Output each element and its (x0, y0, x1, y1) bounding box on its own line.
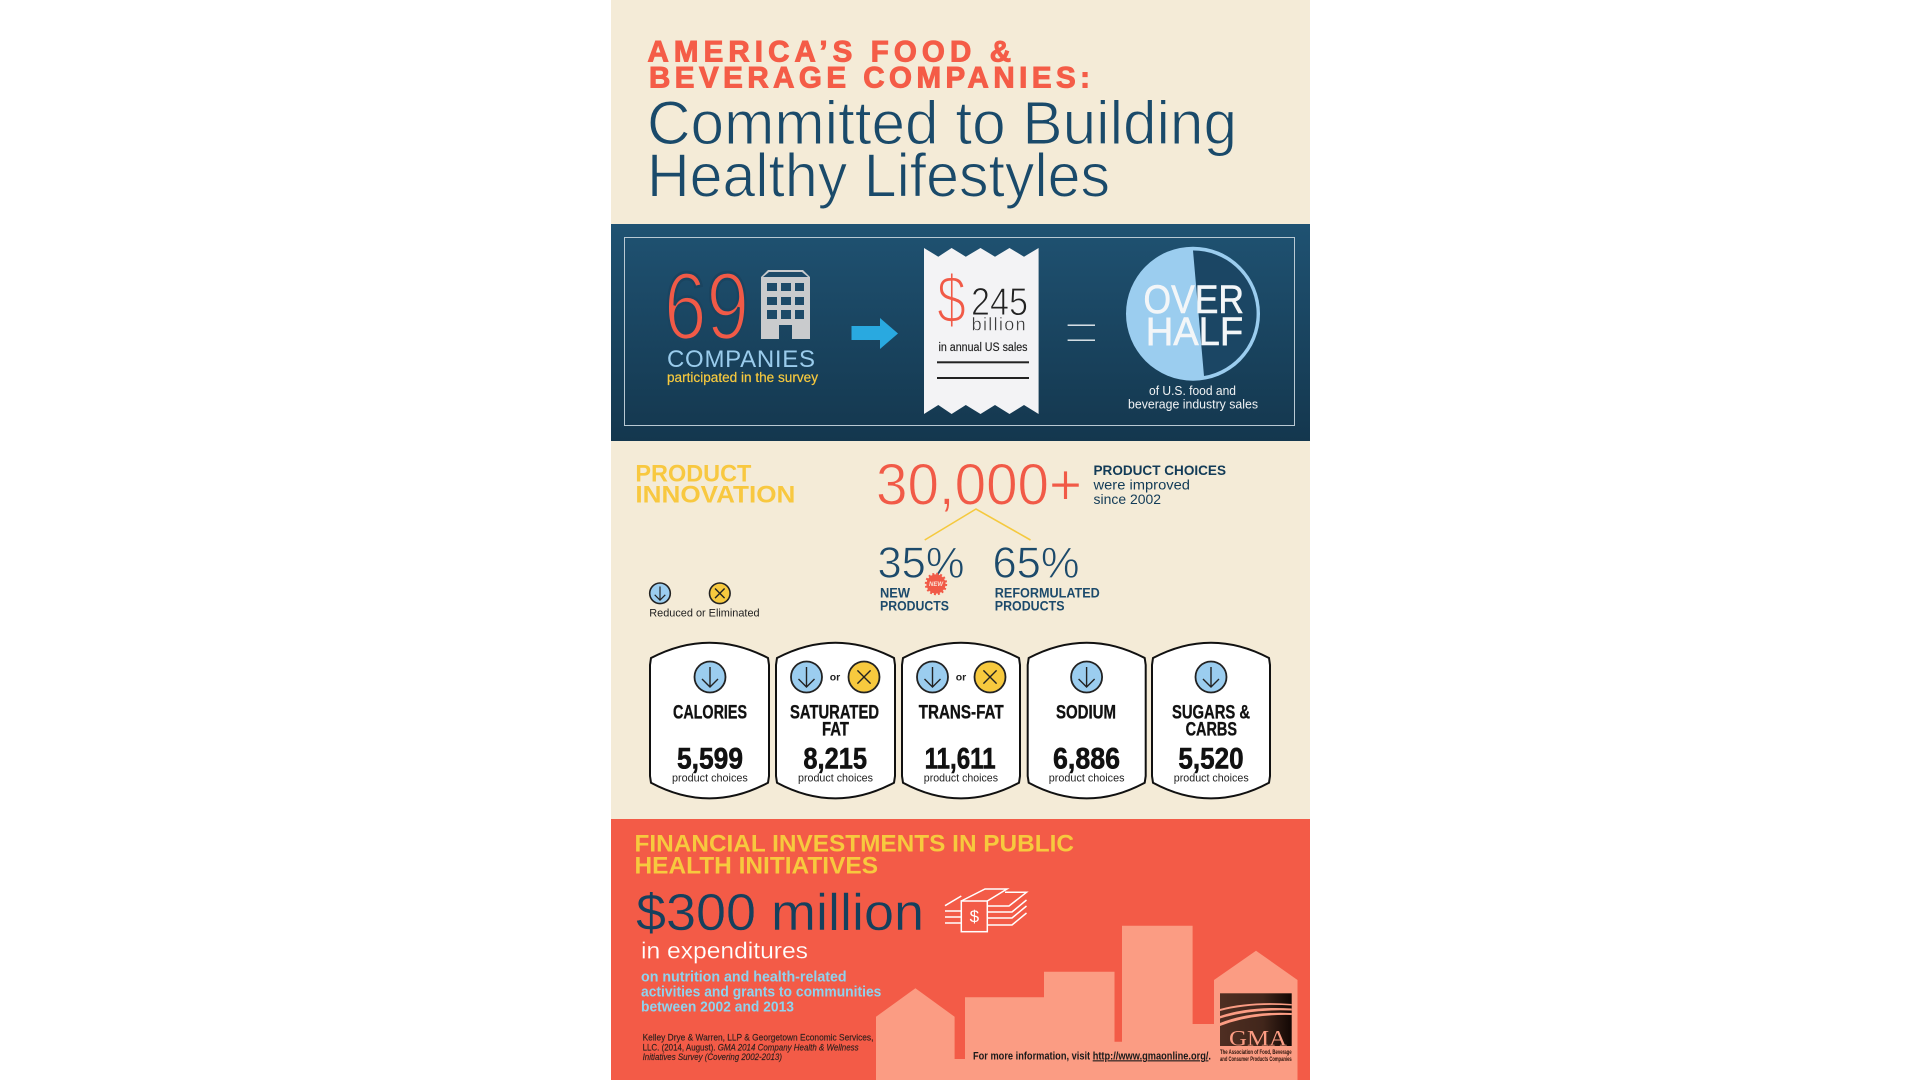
title: Committed to Building Healthy Lifestyles: Committed to Building (647, 89, 1237, 157)
stat: 65 percent reformulated products (992, 538, 1100, 614)
heading: America's food and beverage companies (648, 35, 1090, 94)
caption: product choices (1174, 773, 1249, 785)
text: in annual US sales: in annual US sales (938, 342, 1028, 354)
icon: eliminated (974, 662, 1006, 692)
text: more information link: For more information, visit http://www.gmaonline.org/. (973, 1050, 1211, 1062)
icon: reduced (694, 662, 726, 692)
heading: America's food and beverage companies: AMERICA’S FOOD & (648, 35, 1011, 68)
illustration: city skyline (876, 926, 1298, 1080)
caption: product choices (1049, 773, 1125, 785)
label: trans-fat: TRANS-FAT (919, 702, 1004, 723)
arrow (852, 318, 898, 349)
stat: 35 percent new products: 35% (878, 538, 964, 587)
card: saturated fat (776, 643, 895, 798)
logo: GMA (1220, 993, 1292, 1063)
text: product choices improved: since 2002 (1094, 491, 1161, 507)
label: reformulated products: PRODUCTS (995, 599, 1064, 614)
text: product choices improved: PRODUCT CHOICES (1094, 462, 1226, 478)
chart: over half pie (1126, 247, 1260, 381)
label: or: or (956, 672, 966, 684)
text: on nutrition and health-related activities: between 2002 and 2013 (641, 1000, 794, 1016)
citation: Initiatives Survey (Covering 2002-2013) (643, 1052, 782, 1063)
label: sodium: SODIUM (1056, 702, 1116, 723)
legend: reduced or eliminated (649, 583, 760, 620)
icon: reduced (791, 662, 822, 692)
text: over half (1144, 278, 1244, 354)
text: over half: OVER (1144, 278, 1244, 322)
caption: product choices (672, 773, 748, 785)
number: 11,611: 11,611 (925, 742, 996, 775)
panel: product innovation (611, 441, 1310, 819)
caption: product choices (924, 773, 998, 785)
icon: eliminated cross (710, 583, 730, 604)
label: reformulated products (995, 585, 1100, 614)
label: saturated fat (790, 702, 879, 740)
label: participated in the survey: participated in the survey (667, 370, 818, 385)
label: saturated fat: FAT (822, 719, 849, 740)
icon: office building (761, 270, 810, 339)
number: 5,599: 5,599 (677, 742, 743, 775)
icon: eliminated (848, 662, 880, 692)
stat: 65 percent reformulated products: 65% (992, 538, 1080, 587)
heading: product innovation: PRODUCT (635, 461, 752, 488)
text: on nutrition and health-related activities: on nutrition and health-related (641, 970, 847, 986)
label: legend text: Reduced or Eliminated (649, 608, 760, 620)
text: billion: billion (972, 315, 1026, 335)
label: or: or (830, 672, 840, 684)
citation: Kelley Drye & Warren, LLP & Georgetown Economic Services, (643, 1033, 873, 1044)
label: sugars and carbs: CARBS (1186, 719, 1237, 740)
card: sodium (1028, 643, 1146, 798)
label: new products (880, 585, 949, 614)
label: new products: NEW (880, 585, 910, 600)
label: saturated fat: SATURATED (790, 702, 879, 723)
icon: reduced (1196, 662, 1226, 692)
number: 245: 245 (971, 281, 1028, 324)
citation (643, 1033, 873, 1063)
caption: share of industry sales: of U.S. food and (1149, 384, 1236, 398)
icon: reduced (917, 662, 948, 692)
number: 8,215: 8,215 (803, 742, 867, 775)
text: over half: HALF (1146, 310, 1243, 354)
heading: product innovation: INNOVATION (635, 481, 795, 508)
label: sugars and carbs (1172, 702, 1250, 740)
number: 6,886: 6,886 (1053, 742, 1120, 775)
logo tagline (1220, 1050, 1292, 1063)
panel: title header (611, 0, 1310, 224)
label: sugars and carbs: SUGARS & (1172, 702, 1250, 723)
citation: LLC. (2014, August). GMA 2014 Company Health & Wellness (643, 1042, 859, 1053)
heading: product innovation (635, 461, 795, 508)
connector lines (925, 509, 1030, 540)
text: product choices improved (1092, 462, 1226, 507)
text: dollar sign: $ (937, 262, 966, 338)
logo tagline: and Consumer Products Companies (1220, 1057, 1292, 1063)
text: on nutrition and health-related activities (641, 970, 881, 1016)
dollar symbol on note: $ (970, 907, 980, 926)
label: new products: PRODUCTS (880, 599, 949, 614)
title: Committed to Building Healthy Lifestyles: Healthy Lifestyles (647, 142, 1110, 210)
logo tagline: The Association of Food, Beverage (1220, 1050, 1292, 1056)
number: 5,520: 5,520 (1178, 742, 1244, 775)
heading: financial investments in public health initiatives: FINANCIAL INVESTMENTS IN PUBLIC (634, 831, 1074, 858)
number: 69: 69 (664, 253, 749, 360)
equals sign (1068, 324, 1095, 341)
label: calories: CALORIES (673, 702, 747, 723)
heading: financial investments in public health initiatives: HEALTH INITIATIVES (634, 852, 878, 879)
title: Committed to Building Healthy Lifestyles (647, 89, 1237, 210)
badge: new: NEW (929, 582, 944, 588)
icon: reduced arrow (650, 583, 670, 604)
card: trans-fat (902, 643, 1020, 798)
text: product choices improved: were improved (1092, 476, 1190, 492)
panel: financial investments (611, 819, 1310, 1080)
heading: America's food and beverage companies: BEVERAGE COMPANIES: (649, 61, 1090, 94)
icon: reduced (1071, 662, 1102, 692)
heading: financial investments in public health initiatives (634, 831, 1074, 879)
caption: share of industry sales (1128, 384, 1258, 412)
logo wordmark: GMA (1229, 1026, 1287, 1050)
label: companies: COMPANIES (667, 346, 815, 373)
caption: share of industry sales: beverage industry sales (1128, 398, 1258, 412)
icon: stack of money (945, 889, 1026, 932)
receipt (924, 248, 1039, 414)
number: 300 million dollars: $300 million (636, 884, 924, 942)
number: 30,000+: 30,000+ (876, 452, 1082, 517)
card: calories (650, 643, 769, 798)
caption: product choices (798, 773, 873, 785)
label: reformulated products: REFORMULATED (995, 585, 1100, 600)
text: on nutrition and health-related activities: activities and grants to communities (641, 985, 881, 1001)
stat: 35 percent new products (878, 538, 964, 614)
card: sugars and carbs (1152, 643, 1270, 798)
panel: survey summary (611, 224, 1310, 441)
text: in expenditures: in expenditures (641, 937, 808, 963)
